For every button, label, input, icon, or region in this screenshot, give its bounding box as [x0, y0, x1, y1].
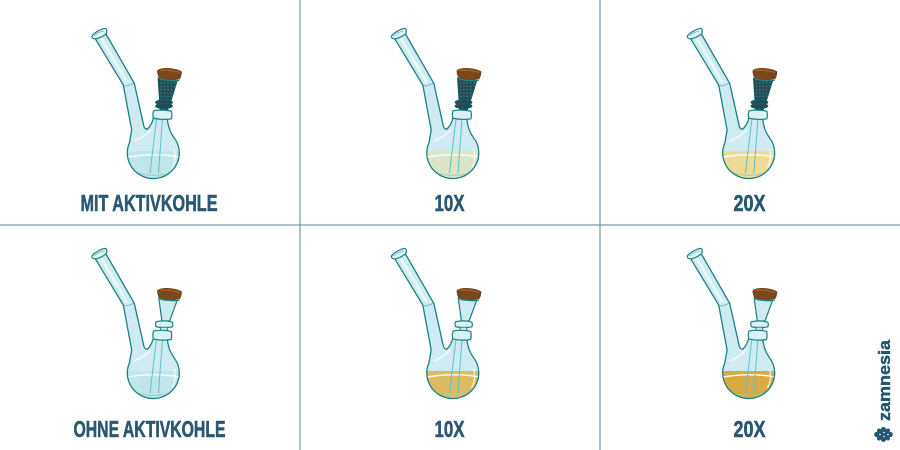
logo wordmark: zamnesia: [875, 339, 894, 421]
icon: bong with carbon filter, pale water: [391, 28, 484, 181]
label: 10X bottom: 10X: [434, 416, 465, 442]
icon: bong without filter, dark amber water: [687, 248, 780, 401]
label: ohne Aktivkohle: OHNE AKTIVKOHLE: [74, 416, 226, 442]
label: 20X top: 20X: [734, 190, 766, 216]
label: mit Aktivkohle: MIT AKTIVKOHLE: [80, 190, 218, 216]
panel: with activated carbon, clean: [80, 28, 218, 216]
label: 20X bottom: 20X: [734, 416, 766, 442]
icon: bong without filter, amber water: [391, 248, 484, 401]
icon: bong without filter, clean water: [92, 248, 185, 401]
icon: bong with carbon filter, yellow water: [687, 28, 780, 181]
icon: bong with carbon filter, clean water: [92, 28, 185, 181]
panel: without activated carbon, 20x: [687, 248, 780, 442]
logo: zamnesia: [874, 339, 894, 442]
panel: with activated carbon, 20x: [687, 28, 780, 216]
panel: without activated carbon, clean: [74, 248, 226, 442]
panel: without activated carbon, 10x: [391, 248, 484, 442]
panel: with activated carbon, 10x: [391, 28, 484, 216]
label: 10X top: 10X: [434, 190, 465, 216]
icon: logo emblem: [874, 427, 893, 442]
